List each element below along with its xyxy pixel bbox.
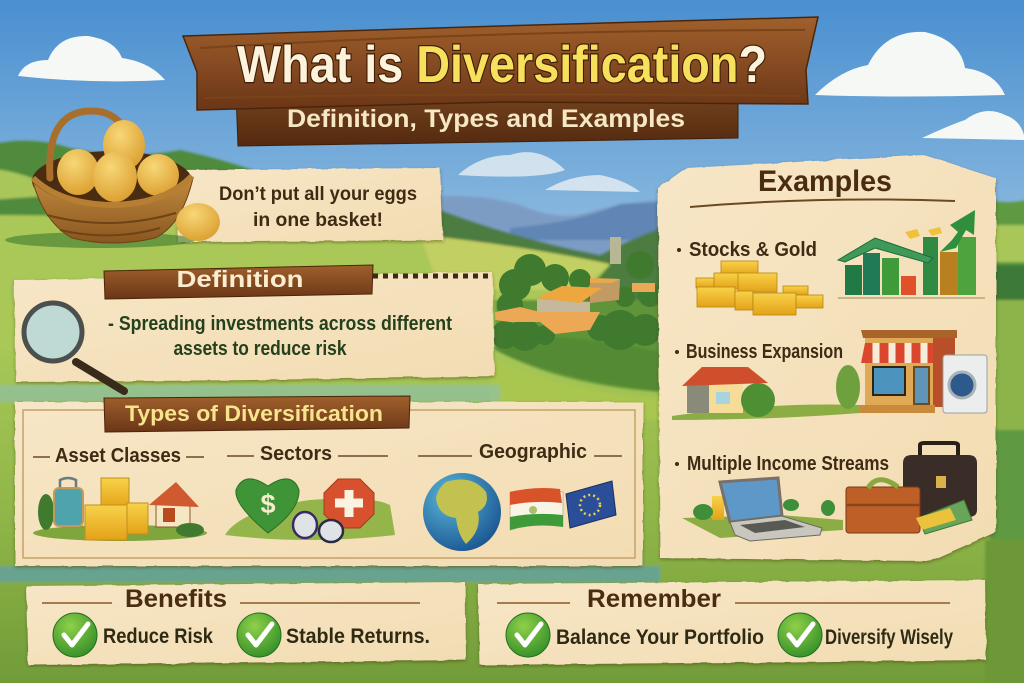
heading: examples: Examples (758, 165, 892, 198)
example: multiple income streams: Multiple Income Streams (687, 453, 889, 475)
main plank (183, 17, 818, 110)
panel: types of diversification (15, 396, 643, 566)
label: asset classes: Asset Classes (55, 445, 181, 467)
heading: remember: Remember (587, 585, 721, 613)
heading: definition: Definition (176, 266, 304, 292)
clouds (18, 32, 1024, 192)
icon: egg basket (5, 111, 220, 248)
example: stocks and gold (677, 210, 985, 315)
heading: types (104, 396, 410, 432)
label: sectors: Sectors (260, 443, 332, 465)
text: definition: - Spreading investments across different (108, 313, 452, 335)
panel: benefits (26, 582, 466, 665)
heading: benefits: Benefits (125, 585, 227, 613)
icon: EU flag (566, 481, 616, 528)
slogan note: in one basket! (253, 210, 383, 231)
text: definition: assets to reduce risk (174, 338, 347, 360)
trees (491, 251, 662, 351)
title banner (183, 17, 818, 146)
icon: flag of India (510, 488, 563, 530)
main plank: What is Diversification? (237, 36, 767, 94)
icon: sectors: $ (260, 489, 276, 519)
slogan note: Don’t put all your eggs (219, 184, 417, 205)
icon: asset classes (33, 478, 207, 541)
label: geographic: Geographic (479, 441, 587, 463)
example: business expansion (672, 330, 987, 420)
heading: types: Types of Diversification (125, 401, 383, 426)
panel: examples (658, 155, 996, 561)
panel: remember (478, 580, 986, 665)
icon: globe (423, 473, 501, 551)
item: diversify wisely (778, 613, 953, 657)
heading: definition (104, 265, 373, 299)
item: stable returns: Stable Returns. (286, 625, 430, 648)
slogan note (178, 168, 443, 242)
example: business expansion: Business Expansion (686, 341, 843, 363)
icon: sectors (225, 479, 395, 542)
subtitle plank (236, 92, 738, 146)
example: multiple income streams (675, 443, 977, 541)
panel: definition (14, 265, 495, 391)
text: definition (108, 313, 452, 360)
item: reduce risk (53, 613, 213, 657)
item: reduce risk: Reduce Risk (103, 625, 213, 648)
example: stocks and gold: Stocks & Gold (689, 239, 817, 261)
item: balance your portfolio: Balance Your Portfolio (556, 626, 764, 649)
icon: magnifying glass (24, 303, 124, 391)
distant silo (610, 237, 621, 264)
item: diversify wisely: Diversify Wisely (825, 626, 953, 649)
item: stable returns (237, 613, 430, 657)
heading: examples (690, 165, 955, 207)
item: balance your portfolio (506, 613, 764, 657)
farmhouse (495, 278, 655, 334)
subtitle plank: Definition, Types and Examples (287, 105, 685, 133)
